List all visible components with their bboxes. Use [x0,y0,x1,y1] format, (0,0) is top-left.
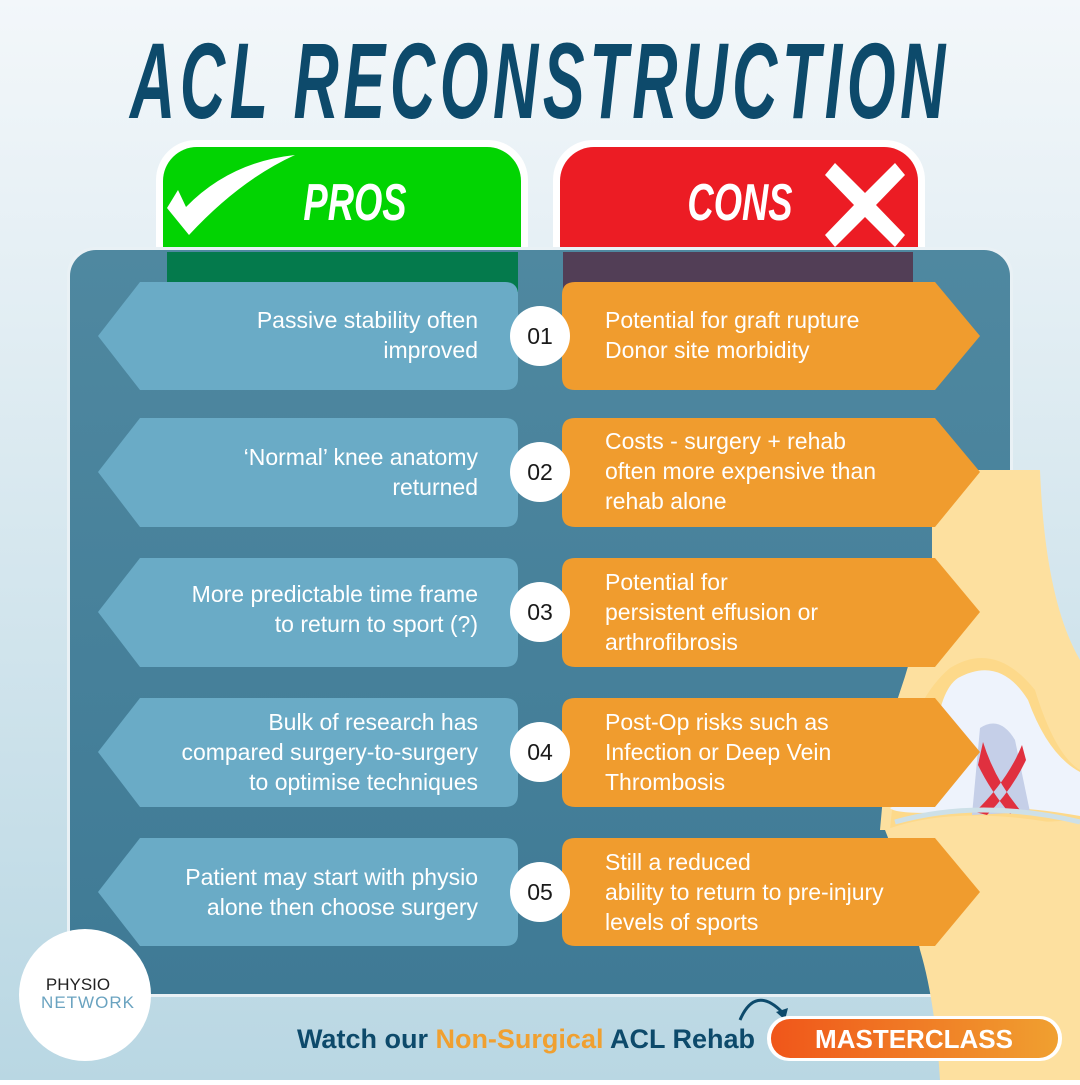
row 02 [98,418,980,527]
row 05: levels of sports [605,909,758,935]
row 04: Thrombosis [605,769,725,795]
row 02: ‘Normal’ knee anatomy [244,444,478,470]
knee illustration [880,470,1080,1080]
row 03: Potential for [605,569,728,595]
cons tab: CONS [687,172,793,232]
row 03: persistent effusion or [605,599,818,625]
row 03: to return to sport (?) [275,611,478,637]
call to action: MASTERCLASS [815,1024,1013,1054]
row 01 [98,282,980,390]
call to action: Watch our Non-Surgical ACL Rehab [297,1024,755,1054]
row 04: compared surgery-to-surgery [181,739,478,765]
icon: check [167,155,295,235]
logo: NETWORK [41,993,135,1012]
row 05: alone then choose surgery [207,894,478,920]
row 03: arthrofibrosis [605,629,738,655]
main panel [67,247,1013,997]
row 04: Bulk of research has [268,709,478,735]
row 05: Patient may start with physio [185,864,478,890]
row 05: Still a reduced [605,849,751,875]
call to action [297,1000,1062,1061]
row 04: Infection or Deep Vein [605,739,831,765]
row 02: rehab alone [605,488,726,514]
row 03 [98,558,980,667]
row 01: Donor site morbidity [605,337,810,363]
row 02: 02 [527,459,553,485]
cons tab [553,140,925,292]
logo: PHYSIO [46,975,110,994]
arrow [740,1000,782,1020]
pros tab [156,140,528,292]
logo [19,929,151,1061]
masterclass button [767,1016,1062,1061]
row 01: Potential for graft rupture [605,307,859,333]
row 02: returned [392,474,478,500]
row 01: Passive stability often [257,307,478,333]
row 04: to optimise techniques [249,769,478,795]
pros tab: PROS [303,172,407,232]
row 05 [98,838,980,946]
row 01: improved [383,337,478,363]
row 01: 01 [527,323,553,349]
icon: cross [825,163,905,247]
row 03: More predictable time frame [192,581,478,607]
row 03: 03 [527,599,553,625]
row 02: often more expensive than [605,458,876,484]
row 05: ability to return to pre-injury [605,879,884,905]
title: ACL RECONSTRUCTION [129,20,950,141]
row 04: Post-Op risks such as [605,709,829,735]
row 05: 05 [527,879,553,905]
row 04: 04 [527,739,553,765]
row 04 [98,698,980,807]
row 02: Costs - surgery + rehab [605,428,846,454]
